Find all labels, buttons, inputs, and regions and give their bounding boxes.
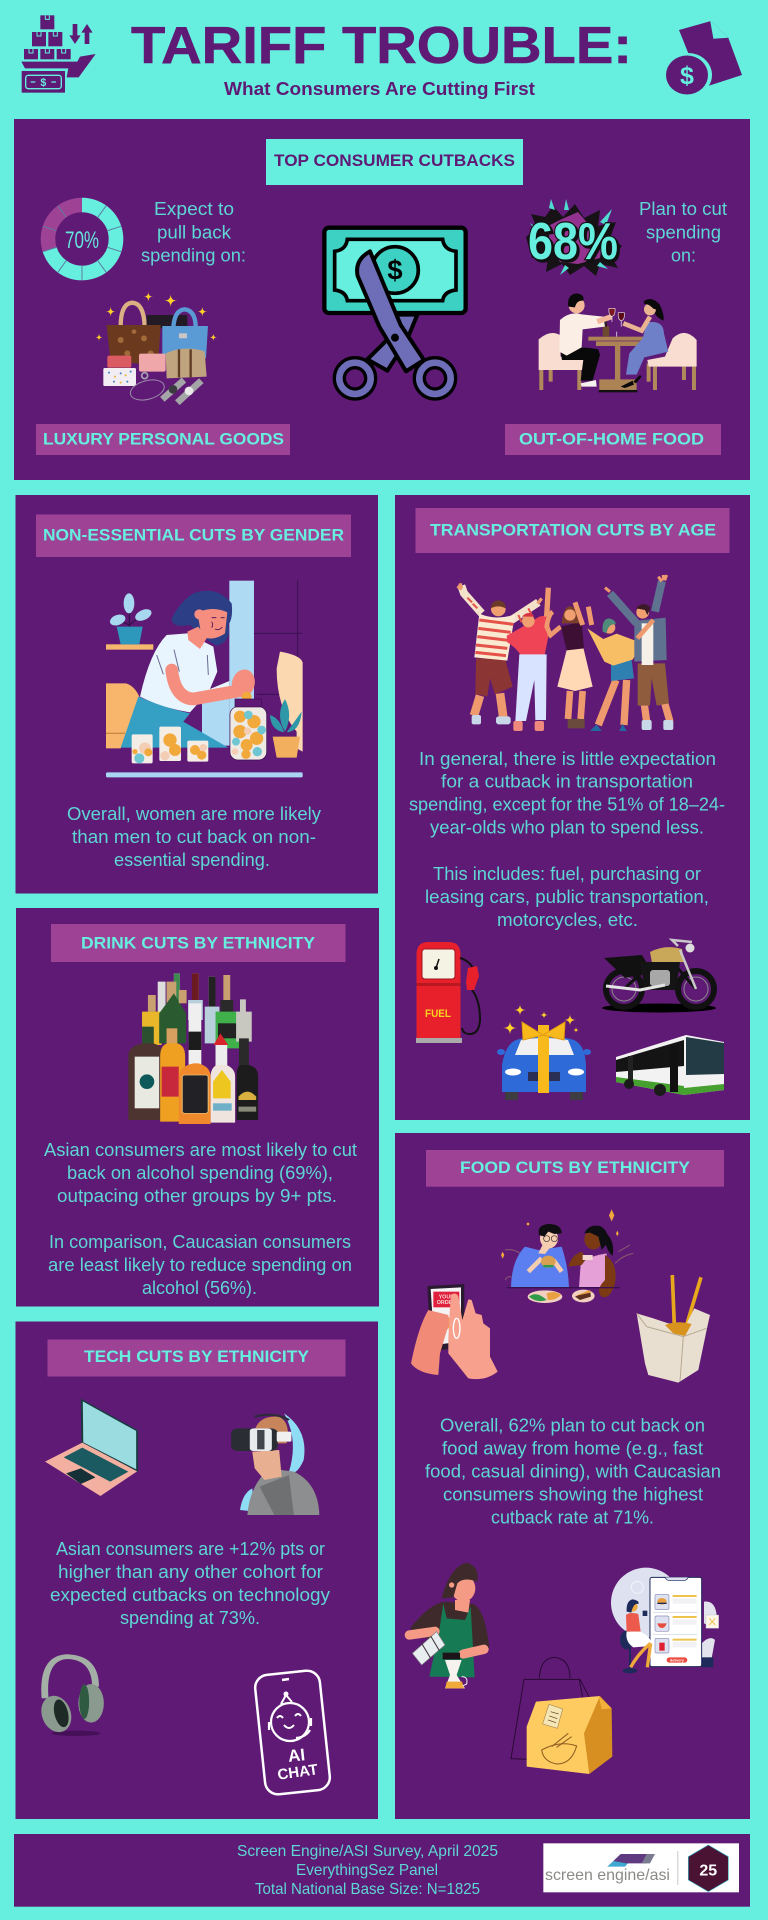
label: out-of-home food: [505, 424, 721, 455]
text: asian consumers technology cutbacks: spending at 73%.: [120, 1608, 260, 1628]
text: this includes fuel, cars, public transportation: [425, 864, 709, 930]
text: little expectation for transportation cutback: spending, except for the 51% of 18–24-: [409, 794, 725, 814]
icon: 68% comic burst: [526, 199, 622, 276]
text: little expectation for transportation cutback: for a cutback in transportation: [441, 772, 693, 792]
heading: food cuts by ethnicity: FOOD CUTS BY ETHNICITY: [460, 1159, 690, 1177]
text: women more likely to cut: Overall, women are more likely: [67, 804, 321, 824]
text: expect to pull back spending on: spending on:: [141, 246, 246, 266]
panel: food cuts by ethnicity: [395, 1133, 750, 1819]
subtitle: What Consumers Are Cutting First: [224, 79, 535, 99]
heading: non-essential cuts by gender: [36, 514, 351, 557]
icon: 68% comic burst: 68%: [528, 213, 618, 271]
panel: tech cuts by ethnicity: [16, 1322, 378, 1819]
icon: scissors cutting dollar bill: [324, 228, 466, 394]
icon: AI chat phone: CHAT: [276, 1761, 319, 1784]
icon: document and dollar coin: [664, 21, 742, 97]
text: asian consumers most likely to cut alcohol: back on alcohol spending (69%),: [67, 1163, 333, 1183]
panel: top consumer cutbacks: [14, 119, 750, 480]
icon: person with VR headset: [231, 1413, 319, 1515]
icon: takeout paper bag: [511, 1657, 612, 1774]
icon: laptop: [45, 1400, 137, 1496]
heading: transportation cuts by age: [416, 508, 730, 553]
icon: fuel pump: [416, 942, 480, 1043]
panel: footer source: [14, 1834, 750, 1907]
icon: couple dining: [539, 293, 697, 392]
text: asian consumers most likely to cut alcohol: outpacing other groups by 9+ pts.: [57, 1186, 337, 1206]
text: women more likely to cut: [67, 804, 321, 870]
logo: screen engine/asi: 25: [699, 1863, 717, 1880]
text: survey source: EverythingSez Panel: [296, 1862, 438, 1879]
text: survey source: Total National Base Size: N=1825: [255, 1881, 480, 1898]
text: 62% plan to cut food away from home: [425, 1416, 721, 1528]
text: 62% plan to cut food away from home: cutback rate at 71%.: [491, 1508, 654, 1528]
text: plan to cut spending on: [639, 199, 727, 266]
text: caucasian consumers least likely: [48, 1232, 352, 1298]
label: out-of-home food: OUT-OF-HOME FOOD: [519, 430, 704, 448]
text: survey source: [237, 1843, 498, 1898]
text: little expectation for transportation cutback: year-olds who plan to spend less.: [430, 818, 704, 838]
text: asian consumers technology cutbacks: Asian consumers are +12% pts or: [56, 1539, 325, 1559]
heading: drink cuts by ethnicity: [51, 924, 346, 962]
panel: drink cuts by ethnicity: [16, 908, 379, 1306]
text: caucasian consumers least likely: alcohol (56%).: [142, 1278, 257, 1298]
text: 62% plan to cut food away from home: Overall, 62% plan to cut back on: [440, 1416, 705, 1436]
icon: food delivery app with woman: delivery: [670, 1658, 685, 1662]
text: this includes fuel, cars, public transportation: leasing cars, public transportation,: [425, 887, 709, 907]
heading: tech cuts by ethnicity: TECH CUTS BY ETHNICITY: [84, 1348, 309, 1366]
icon: cargo ship with boxes and dollar bill: $: [40, 77, 46, 89]
heading: food cuts by ethnicity: [426, 1150, 724, 1187]
text: plan to cut spending on: spending: [646, 222, 721, 242]
heading: top consumer cutbacks: [266, 139, 523, 185]
heading: non-essential cuts by gender: NON-ESSENTIAL CUTS BY GENDER: [43, 526, 344, 544]
text: 62% plan to cut food away from home: food away from home (e.g., fast: [442, 1438, 703, 1458]
title: TARIFF TROUBLE:: [131, 17, 632, 75]
text: asian consumers technology cutbacks: [50, 1539, 330, 1628]
text: asian consumers technology cutbacks: higher than any other cohort for: [58, 1562, 323, 1582]
icon: luxury bags and watches: [95, 292, 217, 403]
text: asian consumers most likely to cut alcohol: Asian consumers are most likely to cut: [44, 1140, 357, 1160]
icon: hands holding phone ordering food: [411, 1284, 498, 1379]
chart: 70% donut: [43, 205, 121, 280]
icon: food delivery app with woman: [611, 1568, 719, 1673]
logo: screen engine/asi: [543, 1843, 739, 1892]
text: women more likely to cut: than men to cut back on non-: [72, 827, 316, 847]
icon: car with gift bow: [497, 1004, 591, 1100]
label: luxury personal goods: [36, 424, 290, 455]
text: asian consumers technology cutbacks: expected cutbacks on technology: [50, 1585, 330, 1605]
heading: drink cuts by ethnicity: DRINK CUTS BY ETHNICITY: [81, 935, 315, 953]
icon: scissors cutting dollar bill: $: [387, 254, 403, 285]
icon: cargo ship with boxes and dollar bill: [21, 15, 96, 93]
heading: tech cuts by ethnicity: [48, 1340, 346, 1376]
icon: barista: [409, 1563, 489, 1688]
icon: noodle takeout box: [637, 1275, 710, 1383]
panel: transportation cuts by age: [395, 495, 750, 1120]
text: women more likely to cut: essential spending.: [114, 850, 270, 870]
text: caucasian consumers least likely: are least likely to reduce spending on: [48, 1255, 352, 1275]
text: survey source: Screen Engine/ASI Survey, April 2025: [237, 1843, 498, 1860]
icon: couple eating together: [501, 1209, 633, 1303]
text: little expectation for transportation cutback: [409, 749, 725, 838]
icon: AI chat phone: AI: [287, 1745, 306, 1766]
text: asian consumers most likely to cut alcohol: [44, 1140, 357, 1206]
text: 62% plan to cut food away from home: consumers showing the highest: [443, 1484, 703, 1504]
icon: document and dollar coin: $: [680, 62, 694, 90]
text: this includes fuel, cars, public transportation: This includes: fuel, purchasing or: [433, 864, 701, 884]
icon: city bus: [616, 1035, 724, 1096]
icon: AI chat phone: [254, 1669, 331, 1796]
text: expect to pull back spending on: [141, 199, 246, 266]
text: caucasian consumers least likely: In comparison, Caucasian consumers: [49, 1232, 351, 1252]
text: expect to pull back spending on: pull back: [157, 222, 232, 242]
text: this includes fuel, cars, public transportation: motorcycles, etc.: [497, 910, 638, 930]
icon: hands holding phone ordering food: YOUR: [439, 1294, 454, 1300]
label: luxury personal goods: LUXURY PERSONAL GOODS: [43, 430, 284, 448]
icon: woman saving coins in jars: [106, 581, 303, 777]
text: expect to pull back spending on: Expect to: [154, 199, 234, 219]
text: 62% plan to cut food away from home: food, casual dining), with Caucasian: [425, 1462, 721, 1482]
panel: non-essential cuts by gender: [16, 495, 378, 894]
text: plan to cut spending on: on:: [671, 246, 696, 266]
logo: screen engine/asi: screen engine/asi: [545, 1867, 670, 1884]
icon: headphones: [38, 1657, 104, 1736]
chart: 70% donut: 70%: [65, 227, 99, 254]
icon: fuel pump: FUEL: [425, 1008, 451, 1020]
icon: motorcycle: [602, 940, 716, 1012]
icon: liquor bottles: [128, 973, 258, 1124]
icon: hands holding phone ordering food: ORDER: [437, 1300, 456, 1306]
icon: group of young people cheering: [457, 575, 673, 731]
heading: transportation cuts by age: TRANSPORTATION CUTS BY AGE: [430, 522, 716, 540]
text: little expectation for transportation cutback: In general, there is little expectation: [419, 749, 716, 769]
heading: top consumer cutbacks: TOP CONSUMER CUTBACKS: [274, 152, 515, 170]
text: plan to cut spending on: Plan to cut: [639, 199, 727, 219]
